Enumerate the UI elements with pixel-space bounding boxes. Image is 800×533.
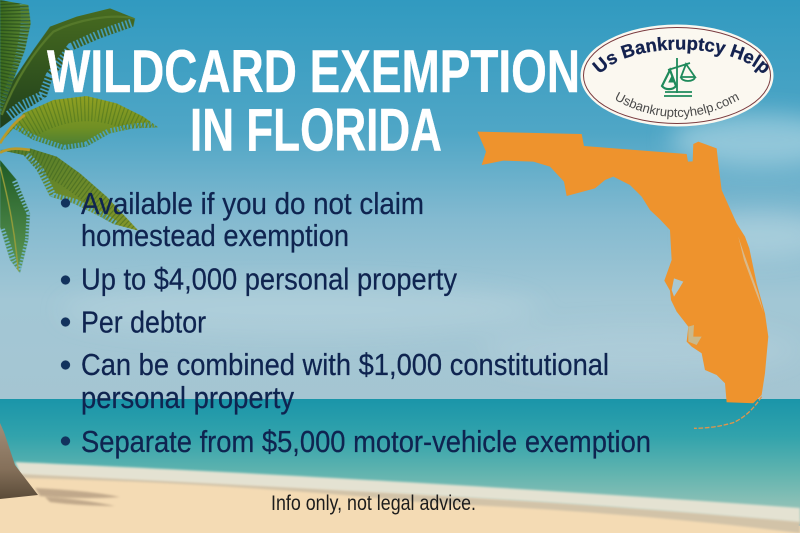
logo arc path holder bottom [602, 92, 752, 117]
state silhouette [477, 132, 768, 403]
lagoon [738, 237, 763, 312]
frond: top left cluster [0, 0, 32, 115]
bullet: combination: Can be combined with $1,000 constitutional [81, 347, 609, 382]
background: beach sand [0, 470, 800, 533]
background: clouds [60, 114, 800, 376]
logo url: Usbankruptcyhelp.com [616, 92, 740, 120]
map: Florida [477, 132, 768, 428]
background: sea [0, 399, 800, 524]
bullet: per debtor: Per debtor [81, 304, 206, 340]
title: WILDCARD EXEMPTION [47, 38, 580, 105]
title: IN FLORIDA [190, 96, 442, 164]
keys [694, 397, 762, 428]
palm shadow [35, 488, 120, 506]
bullet: homestead condition: homestead exemption [81, 218, 349, 253]
frond: middle [4, 96, 158, 150]
background: sky [0, 0, 800, 400]
icon: scales of justice [662, 58, 695, 96]
frond: lower [0, 147, 140, 233]
frond: bottom [0, 160, 32, 275]
bullet: homestead condition [61, 186, 424, 253]
title [47, 38, 580, 164]
palm trunk [0, 423, 38, 499]
logo badge [580, 24, 774, 126]
background: wet sand [20, 472, 800, 533]
bullet: combination [61, 347, 609, 415]
bullet list [61, 186, 651, 459]
bullet: motor vehicle: Separate from $5,000 motor-vehicle exemption [81, 424, 651, 459]
disclaimer: Info only, not legal advice. [271, 492, 476, 515]
bullet: homestead condition: Available if you do not claim [81, 186, 424, 221]
logo heading: Us Bankruptcy Help [592, 36, 768, 74]
frond: upper [0, 0, 137, 130]
logo arc path holder [594, 50, 770, 84]
logo oval [580, 24, 774, 126]
palm tree fronds [0, 0, 160, 275]
bay [672, 278, 683, 297]
frond stems [0, 115, 30, 153]
harbor [688, 325, 702, 345]
logo inner ring [584, 28, 770, 124]
background: surf foam [15, 462, 800, 522]
bullet: combination: personal property [81, 380, 294, 415]
bullet: amount: Up to $4,000 personal property [81, 262, 457, 296]
